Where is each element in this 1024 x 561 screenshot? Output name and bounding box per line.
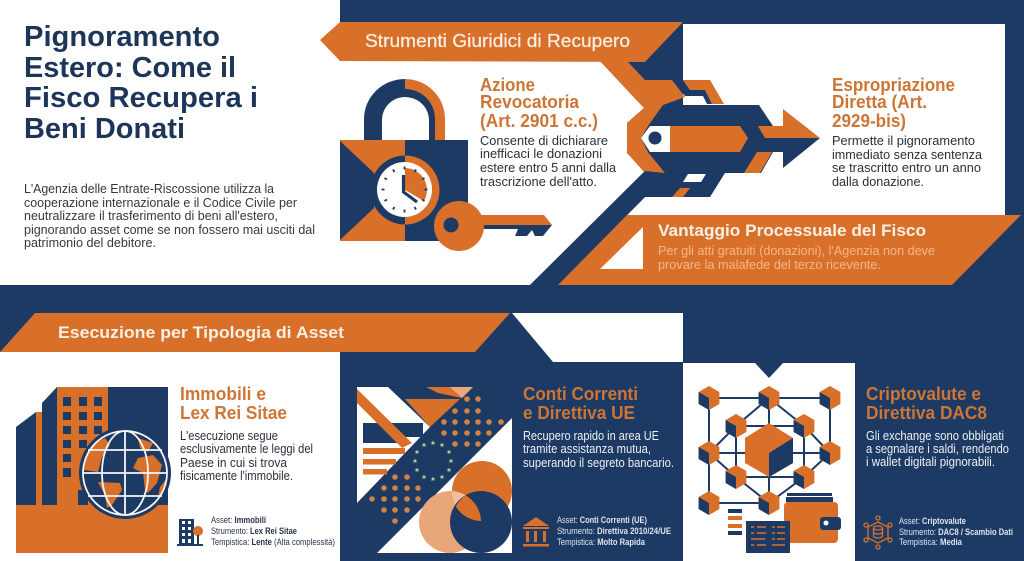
text: azione revocatoria: Consente di dichiarare [480, 133, 608, 148]
text: criptovalute e direttiva dac8: Criptovalute e [866, 384, 981, 404]
text: conti correnti e direttiva ue: superando il segreto bancario. [523, 455, 674, 470]
text: immobili e lex rei sitae: L'esecuzione segue [180, 428, 278, 443]
white corner block [512, 313, 683, 362]
panel: criptovalute [683, 363, 1013, 561]
legend: criptovalute [899, 516, 1013, 548]
icon: padlock with clock and key [340, 79, 552, 251]
legend: immobili: Strumento: Lex Rei Sitae [211, 526, 297, 537]
legend: immobili: Asset: Immobili [211, 515, 266, 526]
text: azione revocatoria [480, 75, 617, 189]
title: Fisco Recupera i [24, 82, 258, 114]
legend: immobili [211, 515, 335, 548]
title: Estero: Come il [24, 52, 236, 84]
text: espropriazione diretta: Permette il pignoramento [832, 133, 975, 148]
text: immobili e lex rei sitae: fisicamente l'immobile. [180, 468, 293, 483]
intro paragraph: cooperazione internazionale e il Codice Civile per [24, 195, 298, 210]
icon: rocket arrow [530, 23, 820, 285]
intro paragraph [24, 181, 315, 250]
legend: conti correnti [557, 515, 671, 548]
callout: vantaggio processuale: Vantaggio Processuale del Fisco [658, 222, 926, 240]
legend: conti correnti: Strumento: Direttiva 2010/24/UE [557, 526, 671, 537]
text: criptovalute e direttiva dac8 [866, 384, 1009, 469]
text: espropriazione diretta [832, 75, 983, 189]
title: Pignoramento [24, 21, 220, 53]
text: immobili e lex rei sitae: esclusivamente le leggi del [180, 441, 313, 456]
text: azione revocatoria: Azione [480, 75, 535, 95]
intro paragraph: L'Agenzia delle Entrate-Riscossione utilizza la [24, 181, 275, 196]
heading banner: esecuzione: Esecuzione per Tipologia di Asset [58, 323, 344, 342]
legend: conti correnti: Tempistica: Molto Rapida [557, 537, 646, 548]
text: espropriazione diretta: dalla donazione. [832, 174, 924, 189]
text: criptovalute e direttiva dac8: Gli exchange sono obbligati [866, 428, 1004, 443]
text: espropriazione diretta: Diretta (Art. [832, 92, 927, 112]
heading banner: strumenti [320, 22, 683, 62]
legend: immobili: Tempistica: Lente (Alta complessità) [211, 537, 335, 548]
callout: vantaggio processuale: Per gli atti gratuiti (donazioni), l'Agenzia non deve [658, 244, 935, 258]
panel: strumenti giuridici [320, 22, 1021, 285]
legend: criptovalute: Tempistica: Media [899, 537, 963, 548]
text: azione revocatoria: (Art. 2901 c.c.) [480, 111, 598, 131]
title: Beni Donati [24, 113, 185, 145]
icon: building legend [177, 519, 203, 546]
panel: immobili [0, 352, 340, 561]
heading banner: strumenti: Strumenti Giuridici di Recupero [365, 31, 630, 51]
text: conti correnti e direttiva ue: Recupero rapido in area UE [523, 428, 659, 443]
legend: conti correnti: Asset: Conti Correnti (UE) [557, 515, 647, 526]
icon: crypto node [864, 516, 892, 549]
panel: conti correnti [357, 384, 674, 553]
icon: blockchain network and wallet [699, 386, 841, 553]
title [24, 21, 258, 145]
intro paragraph: patrimonio del debitore. [24, 235, 156, 250]
text: immobili e lex rei sitae: Lex Rei Sitae [180, 403, 287, 423]
text: criptovalute e direttiva dac8: i wallet digitali pignorabili. [866, 454, 995, 469]
text: criptovalute e direttiva dac8: Direttiva DAC8 [866, 403, 987, 423]
text: azione revocatoria: Revocatoria [480, 92, 580, 112]
callout: vantaggio processuale [558, 215, 1021, 285]
text: immobili e lex rei sitae [180, 384, 313, 483]
icon: buildings and globe [16, 387, 171, 553]
text: espropriazione diretta: se trascritto entro un anno [832, 160, 981, 175]
text: espropriazione diretta: immediato senza sentenza [832, 147, 983, 162]
text: conti correnti e direttiva ue: e Direttiva UE [523, 403, 635, 423]
text: conti correnti e direttiva ue: tramite assistanza mutua, [523, 441, 651, 456]
text: espropriazione diretta: 2929-bis) [832, 111, 906, 131]
text: azione revocatoria: estere entro 5 anni dalla [480, 160, 617, 175]
icon: bank [523, 517, 549, 546]
text: immobili e lex rei sitae: Immobili e [180, 384, 266, 404]
intro paragraph: neutralizzare il trasferimento di beni all'estero, [24, 208, 278, 223]
text: azione revocatoria: trascrizione dell'atto. [480, 174, 597, 189]
text: immobili e lex rei sitae: Paese in cui si trova [180, 455, 288, 470]
text: conti correnti e direttiva ue [523, 384, 674, 470]
callout: vantaggio processuale: provare la malafede del terzo ricevente. [658, 258, 881, 272]
icon: geometric eu illustration [357, 387, 512, 553]
panel: introduction [0, 0, 340, 285]
legend: criptovalute: Asset: Criptovalute [899, 516, 966, 527]
text: conti correnti e direttiva ue: Conti Correnti [523, 384, 638, 404]
intro paragraph: pignorando asset come se non fossero mai usciti dal [24, 222, 315, 237]
text: espropriazione diretta: Espropriazione [832, 75, 955, 95]
text: azione revocatoria: inefficaci le donazioni [480, 146, 602, 161]
heading banner: esecuzione [0, 313, 510, 352]
